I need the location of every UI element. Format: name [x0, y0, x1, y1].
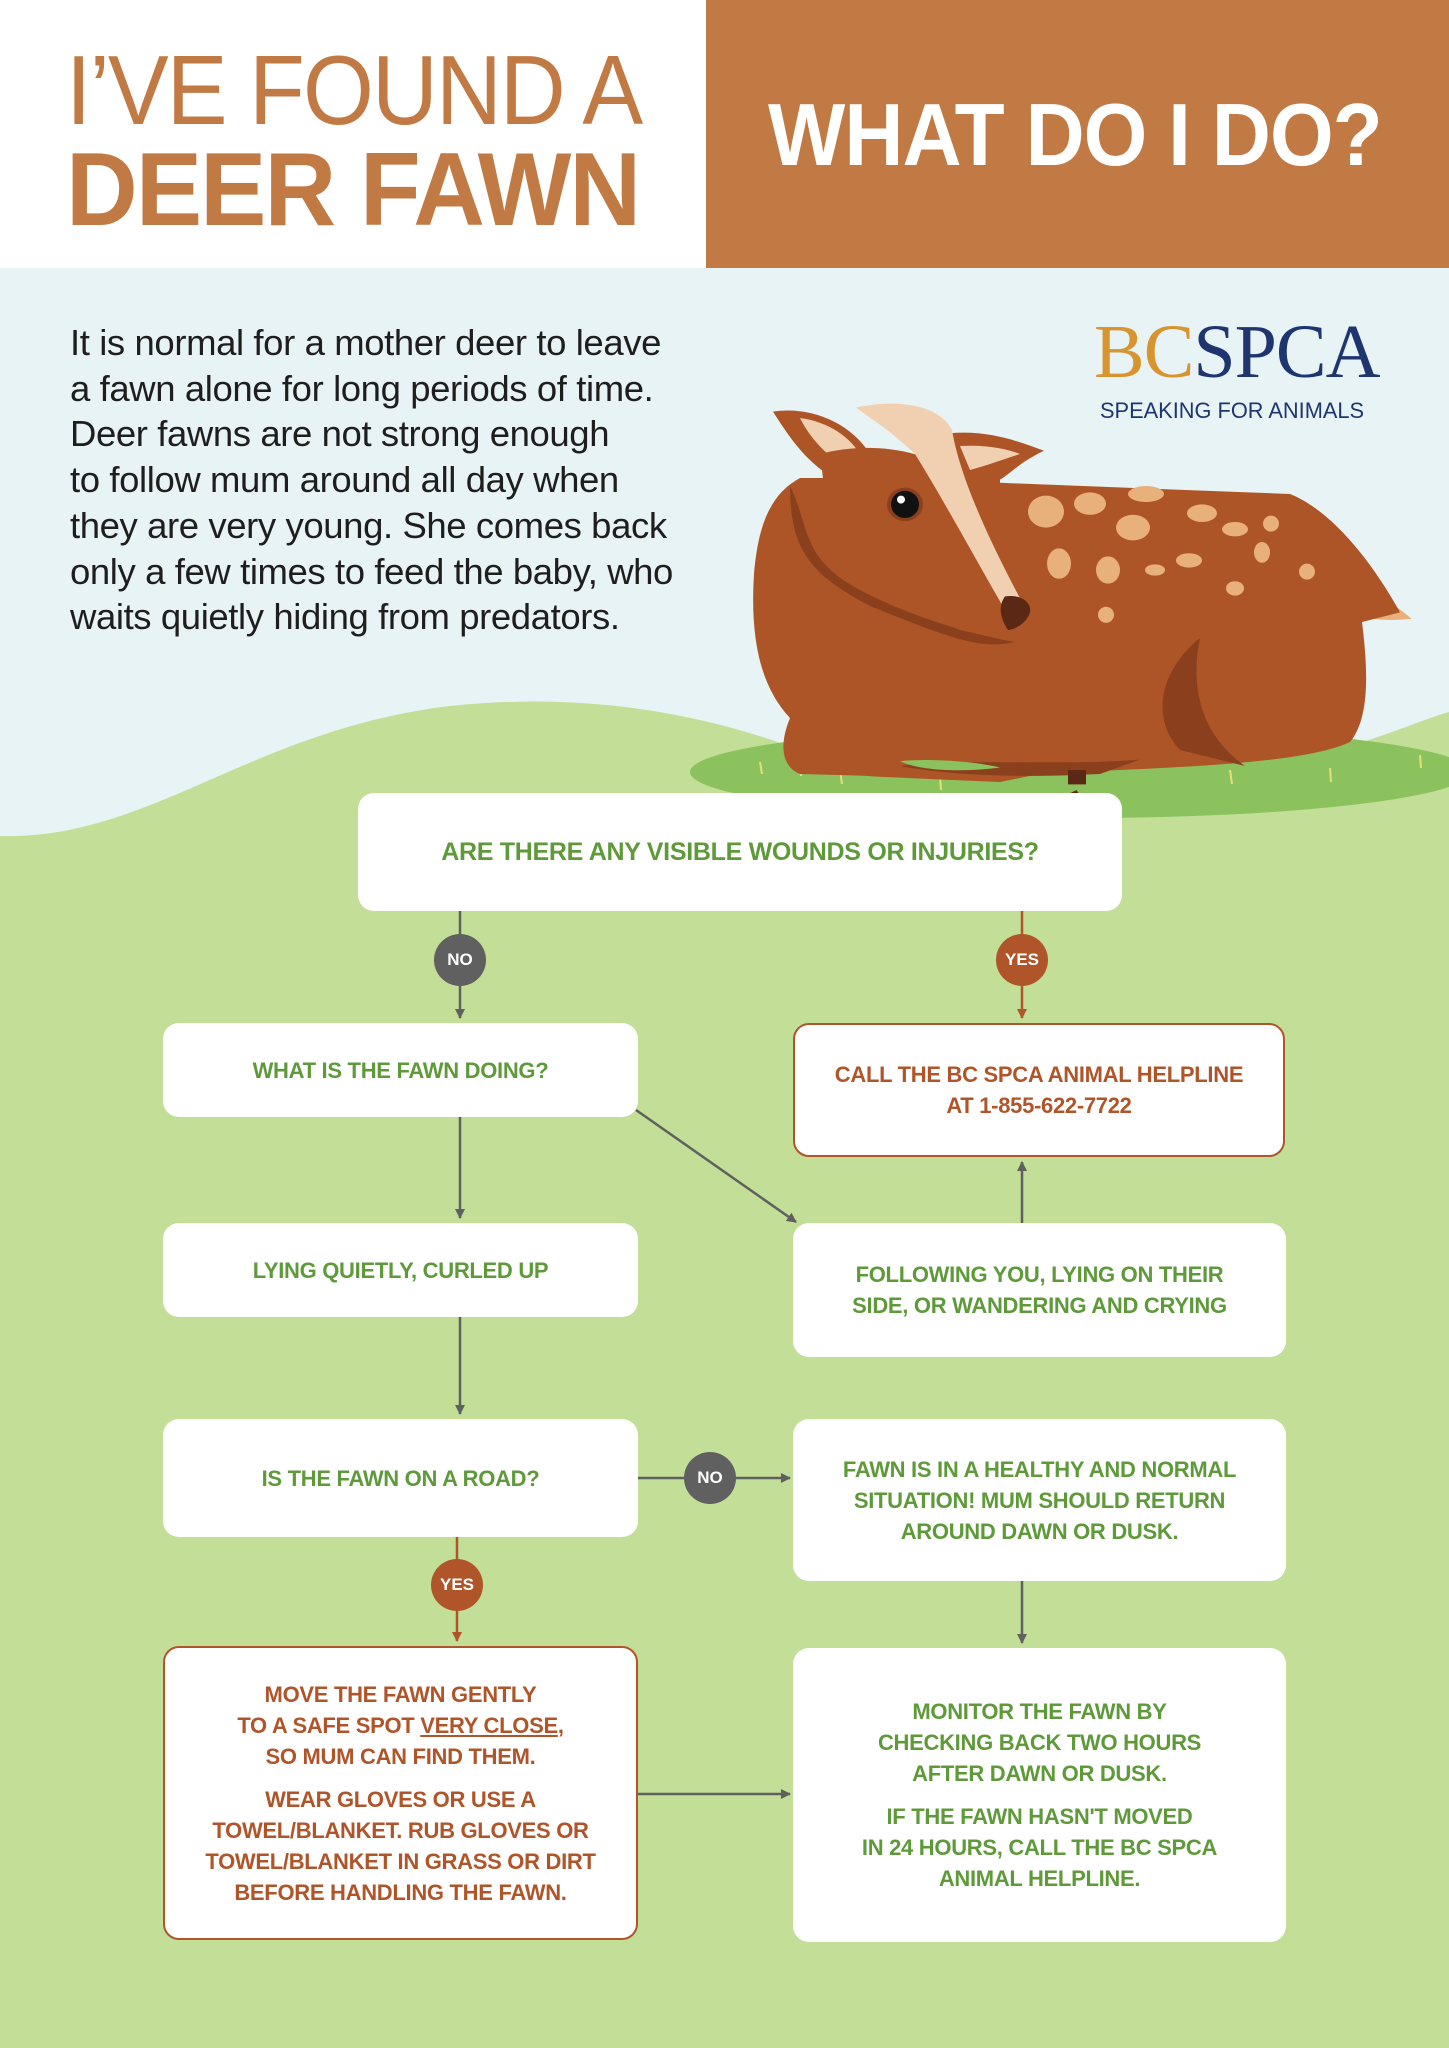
box: call helpline: [793, 1023, 1285, 1157]
box: monitor: CHECKING BACK TWO HOURS: [878, 1730, 1201, 1755]
header: left white: [0, 0, 706, 268]
back leg shadow: [1163, 638, 1245, 766]
box: move the fawn: MOVE THE FAWN GENTLY: [265, 1682, 536, 1706]
intro text: waits quietly hiding from predators.: [70, 596, 620, 637]
nose: [1001, 596, 1030, 630]
header: right brown box: [706, 0, 1449, 268]
intro text: It is normal for a mother deer to leave: [70, 322, 661, 363]
box: following you: [793, 1223, 1286, 1357]
intro text: they are very young. She comes back: [70, 505, 667, 546]
subtitle: WHAT DO I DO?: [768, 85, 1382, 184]
box: what is the fawn doing: WHAT IS THE FAWN DOING?: [253, 1058, 548, 1082]
label: no road: [684, 1452, 736, 1504]
box: monitor: AFTER DAWN OR DUSK.: [912, 1761, 1167, 1786]
eye: [887, 488, 923, 521]
box: question 1: [358, 793, 1122, 911]
box: monitor: IF THE FAWN HASN'T MOVED: [886, 1804, 1193, 1829]
box: move the fawn: WEAR GLOVES OR USE A: [265, 1786, 536, 1812]
box: healthy: [793, 1419, 1286, 1581]
box: move the fawn: TO A SAFE SPOT VERY CLOSE,: [237, 1712, 564, 1738]
tail: [1340, 582, 1412, 620]
intro text: Deer fawns are not strong enough: [70, 413, 609, 454]
box: move the fawn: BEFORE HANDLING THE FAWN.: [234, 1880, 567, 1904]
box: healthy: FAWN IS IN A HEALTHY AND NORMAL: [843, 1456, 1236, 1482]
label: yes: [996, 934, 1048, 986]
box: following you: SIDE, OR WANDERING AND CRYING: [852, 1293, 1227, 1318]
title: DEER FAWN: [66, 132, 639, 248]
ears: [773, 410, 870, 486]
spots: [1028, 486, 1315, 623]
label: no road: NO: [697, 1468, 723, 1487]
label: no: [434, 934, 486, 986]
label: yes road: [431, 1559, 483, 1611]
label: yes road: YES: [440, 1575, 474, 1594]
intro text: [70, 322, 673, 637]
label: no: NO: [447, 950, 473, 969]
box: monitor: [793, 1648, 1286, 1942]
label: yes: YES: [1005, 950, 1039, 969]
forehead stripe: [856, 404, 1022, 610]
box: monitor: MONITOR THE FAWN BY: [912, 1699, 1167, 1724]
title: [66, 35, 643, 248]
intro text: only a few times to feed the baby, who: [70, 551, 673, 592]
box: healthy: SITUATION! MUM SHOULD RETURN: [854, 1488, 1225, 1512]
box: on a road: IS THE FAWN ON A ROAD?: [262, 1466, 539, 1490]
box: move the fawn: TOWEL/BLANKET. RUB GLOVES OR: [212, 1818, 589, 1842]
box: following you: FOLLOWING YOU, LYING ON THEIR: [856, 1262, 1223, 1287]
illustration: deer fawn: [753, 404, 1412, 793]
box: what is the fawn doing: [163, 1023, 638, 1117]
box: move the fawn: [163, 1646, 638, 1940]
box: lying quietly: [163, 1223, 638, 1317]
intro text: a fawn alone for long periods of time.: [70, 368, 653, 409]
logo: BCSPCA: [1094, 310, 1380, 394]
box: call helpline: AT 1-855-622-7722: [946, 1093, 1132, 1118]
front leg gap: [900, 760, 1000, 770]
box: move the fawn: SO MUM CAN FIND THEM.: [266, 1744, 535, 1768]
box: move the fawn: TOWEL/BLANKET IN GRASS OR DIRT: [205, 1848, 596, 1874]
hooves: [1068, 770, 1086, 784]
box: healthy: AROUND DAWN OR DUSK.: [901, 1518, 1178, 1544]
intro text: to follow mum around all day when: [70, 459, 619, 500]
box: call helpline: CALL THE BC SPCA ANIMAL HELPLINE: [835, 1062, 1243, 1087]
neck line: [790, 486, 1015, 644]
title: I’VE FOUND A: [66, 35, 641, 145]
box: lying quietly: LYING QUIETLY, CURLED UP: [253, 1258, 548, 1282]
box: on a road: [163, 1419, 638, 1537]
ground patch: [690, 726, 1449, 818]
body: [753, 478, 1400, 782]
box: question 1: ARE THERE ANY VISIBLE WOUNDS OR INJURIES?: [441, 838, 1039, 866]
head: [820, 448, 1020, 633]
logo: SPEAKING FOR ANIMALS: [1100, 398, 1364, 423]
box: monitor: ANIMAL HELPLINE.: [939, 1866, 1140, 1891]
box: monitor: IN 24 HOURS, CALL THE BC SPCA: [862, 1835, 1217, 1860]
